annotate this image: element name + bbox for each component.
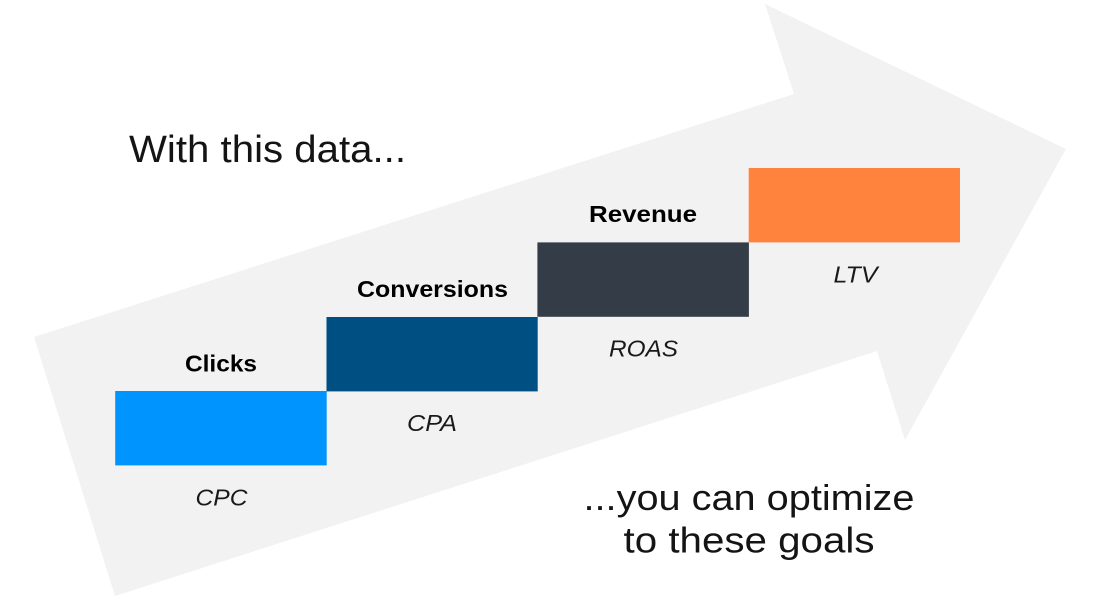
metric: ROAS: ROAS [609, 336, 679, 362]
label: Conversions: Conversions [357, 276, 508, 302]
bar: LTV [749, 168, 960, 242]
bar: revenue [537, 242, 749, 317]
step: conversions [326, 276, 538, 436]
bar: conversions [326, 317, 538, 391]
step: LTV [749, 168, 960, 288]
heading: with this data: With this data... [129, 129, 406, 171]
metric: CPA: CPA [407, 410, 457, 436]
caption: optimize to these goals: ...you can optimize [584, 477, 914, 518]
label: Revenue: Revenue [589, 201, 697, 227]
caption: optimize to these goals: to these goals [624, 520, 874, 560]
bar: clicks [115, 391, 327, 465]
caption: optimize to these goals [584, 477, 914, 560]
label: Clicks: Clicks [185, 350, 257, 376]
step: revenue [537, 201, 749, 362]
step: clicks [115, 350, 327, 510]
metric: LTV: LTV [834, 262, 880, 288]
metric: CPC: CPC [196, 484, 248, 510]
